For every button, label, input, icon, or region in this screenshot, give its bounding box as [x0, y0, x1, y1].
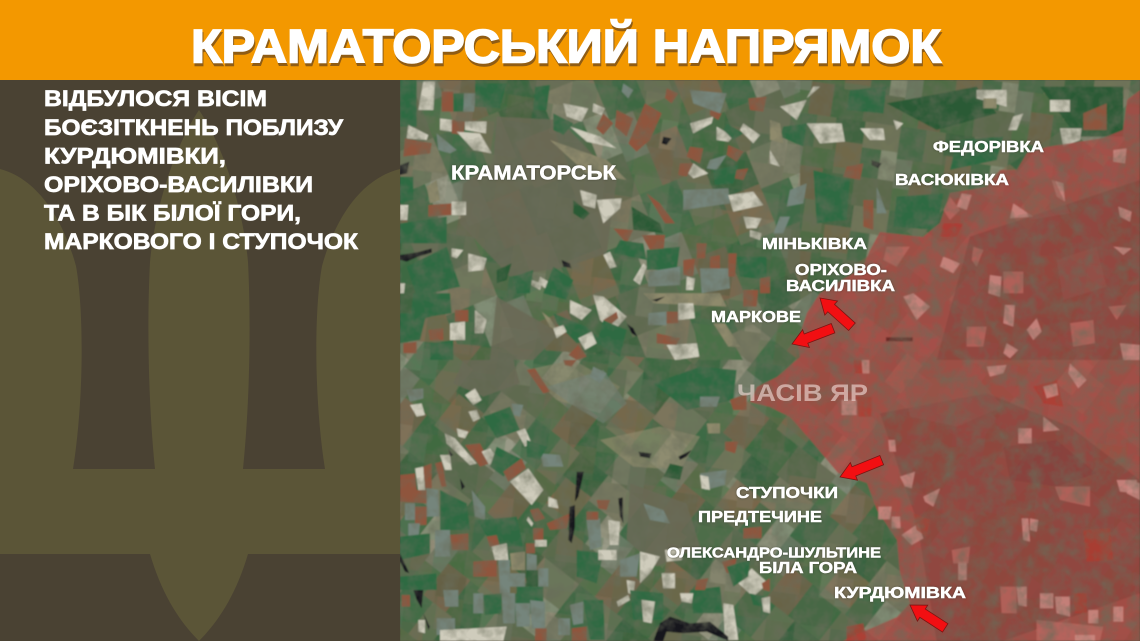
text block: summary: МАРКОВОГО І СТУПОЧОК	[44, 229, 359, 254]
frontline: occupied territory	[750, 90, 1140, 641]
map label: Курдюмівка: КУРДЮМІВКА	[834, 585, 966, 602]
icon: trident watermark	[0, 110, 400, 640]
map label: Оріхово-Василівка: ОРІХОВО-	[795, 262, 887, 279]
farmland south-west quadrant	[400, 360, 770, 641]
map label: Маркове: МАРКОВЕ	[711, 309, 801, 326]
text block: summary: ТА В БІК БІЛОЇ ГОРИ,	[44, 200, 301, 226]
farmland north-east quadrant	[770, 87, 1123, 233]
text block: summary: БОЄЗІТКНЕНЬ ПОБЛИЗУ	[44, 115, 343, 140]
map label: Ступочки: СТУПОЧКИ	[736, 485, 838, 502]
arrow: towards Kurdiumivka	[905, 597, 950, 636]
arrow: towards Orikhovo-Vasylivka	[814, 291, 858, 334]
arrow: towards Stupochky	[836, 451, 885, 486]
map label: Васюківка: ВАСЮКІВКА	[895, 172, 1009, 189]
occupied area terrain south-east	[842, 360, 1140, 641]
map label: Олександро-Шультине: ОЛЕКСАНДРО-ШУЛЬТИНЕ	[667, 546, 881, 562]
text block: summary: ВІДБУЛОСЯ ВІСІМ	[44, 86, 267, 111]
map label: Міньківка: МІНЬКІВКА	[762, 236, 867, 253]
text block: summary: ОРІХОВО-ВАСИЛІВКИ	[44, 172, 313, 197]
arrow: towards Markove	[789, 319, 836, 353]
header banner	[0, 0, 1140, 80]
satellite map	[400, 80, 1140, 641]
text block: summary: КУРДЮМІВКИ,	[44, 144, 226, 168]
panel: left text panel	[0, 80, 400, 641]
map label: Біла Гора: БІЛА ГОРА	[759, 560, 857, 577]
title: КРАМАТОРСЬКИЙ НАПРЯМОК	[191, 20, 941, 72]
farmland north-west quadrant	[400, 80, 770, 360]
map label: Краматорськ: КРАМАТОРСЬК	[451, 162, 617, 184]
occupied area terrain east	[883, 148, 1140, 360]
map label: Федорівка: ФЕДОРІВКА	[933, 139, 1044, 156]
map label: Оріхово-Василівка: ВАСИЛІВКА	[786, 278, 895, 295]
map label: Предтечине: ПРЕДТЕЧИНЕ	[698, 509, 822, 526]
text block: summary	[44, 86, 359, 254]
map label: Оріхово-Василівка	[786, 262, 895, 295]
map label: Часів Яр: ЧАСІВ ЯР	[737, 380, 868, 407]
